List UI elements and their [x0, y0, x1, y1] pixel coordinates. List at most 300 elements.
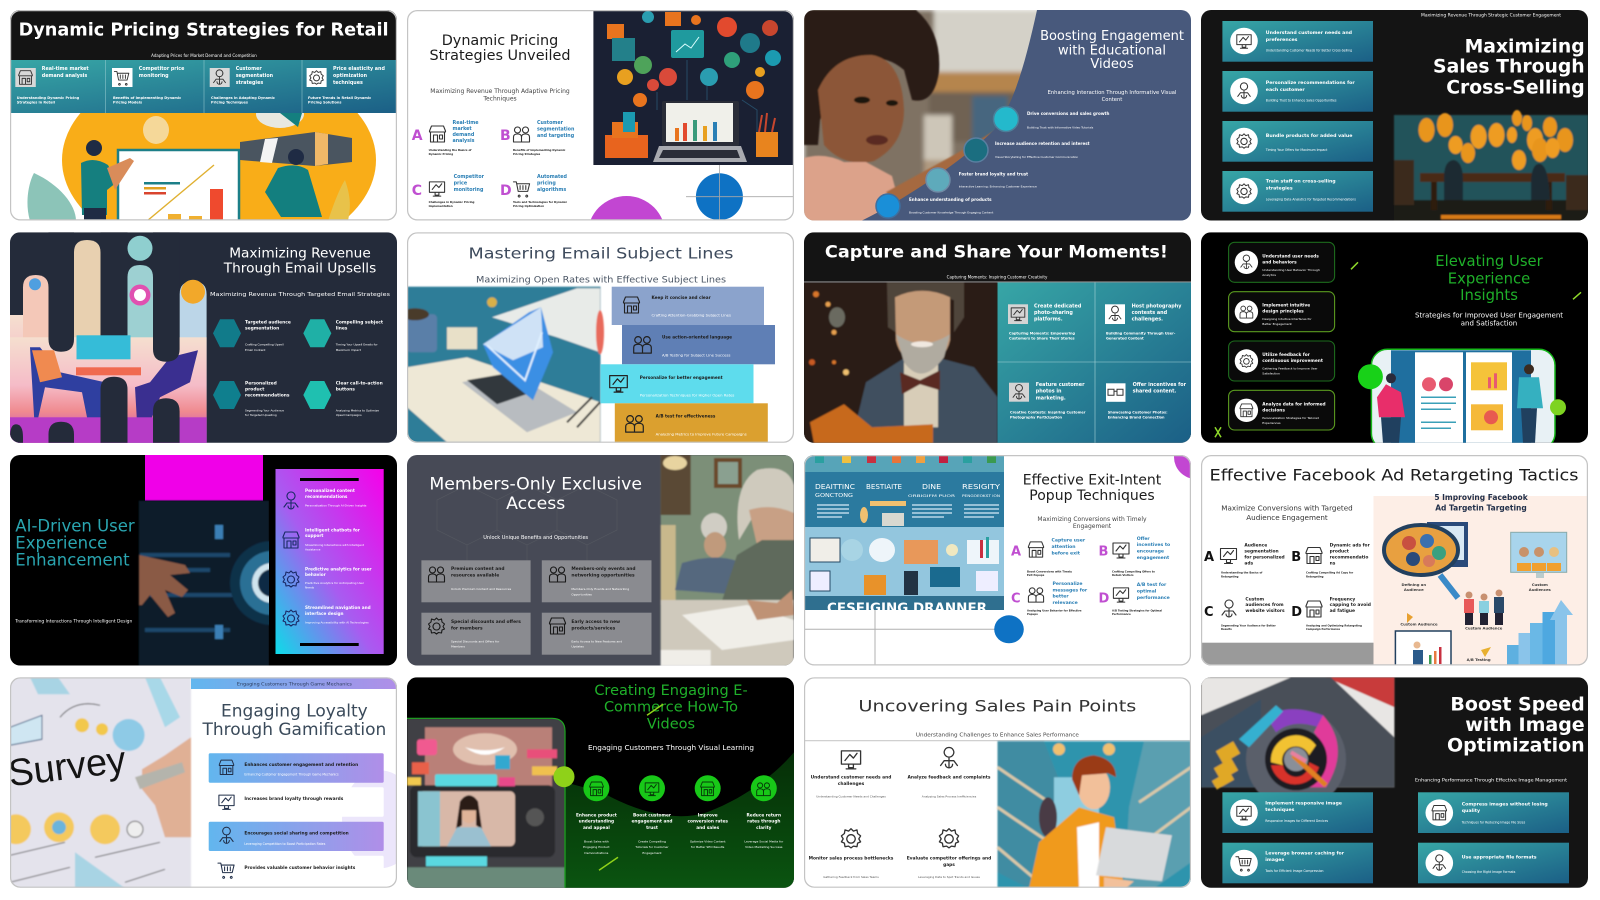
illustration: marketing infographic collage: [804, 455, 1004, 616]
icon: segments: [757, 783, 770, 796]
caption: Benefits of Implementing Dynamic: [113, 96, 181, 100]
card: real-time market demand analysis: [15, 66, 89, 104]
card: premium content: [421, 560, 531, 602]
caption: Enhancing Brand Connection: [1108, 415, 1165, 419]
heading: interface design: [305, 611, 344, 616]
subtitle: Maximizing Conversions with Timely: [1037, 516, 1147, 523]
grey footer block: [1201, 643, 1374, 666]
caption: Tools and Technologies for Dynamic: [513, 200, 567, 204]
blue circle: [994, 615, 1024, 643]
item D: [500, 174, 567, 208]
heading: optimization: [333, 73, 368, 79]
heading: Increases brand loyalty through rewards: [244, 796, 344, 802]
heading: website visitors: [1245, 608, 1285, 614]
caption: Unlock Premium Content and Resources: [451, 587, 512, 591]
heading: techniques: [1265, 807, 1295, 813]
panel: Engaging Loyalty Through Gamification: [1, 677, 418, 888]
card: understand customer needs: [1222, 21, 1373, 62]
heading: Audience: [1244, 542, 1267, 548]
icon: cart: [1236, 857, 1251, 871]
card: analyze data: [1229, 390, 1335, 430]
magenta corner shape: [1174, 435, 1218, 479]
gradient list panel: [276, 469, 384, 654]
caption: Pricing Optimization: [513, 204, 544, 208]
title: with Educational: [1058, 43, 1166, 58]
caption: Improving Accessibility with AI Technologies: [305, 620, 369, 624]
heading: analysis: [452, 138, 475, 144]
icon: store: [590, 782, 603, 796]
heading: Automated: [537, 174, 567, 180]
caption: Engagement: [642, 851, 662, 855]
icon: gear: [939, 829, 959, 848]
heading: ad fatigue: [1330, 608, 1355, 614]
caption: Analyzing User Behavior for Effective: [1027, 608, 1082, 612]
heading: A/B test for: [1137, 582, 1167, 588]
caption: Campaign Performance: [1306, 627, 1340, 631]
heading: Personalized content: [305, 488, 355, 493]
panel: Boost Speed with Image Optimization: [1201, 677, 1588, 888]
caption: Showcasing Customer Photos:: [1108, 410, 1168, 414]
heading: better: [1052, 594, 1069, 600]
heading: lines: [336, 326, 348, 332]
heading: Personalize recommendations for: [1266, 80, 1355, 86]
heading: quality: [1462, 808, 1480, 814]
panel: Members-Only Exclusive Access: [407, 455, 794, 666]
caption: Maximum Impact: [336, 348, 362, 352]
caption: Results: [1221, 627, 1232, 631]
heading: performance: [1137, 595, 1170, 601]
caption: Tutorials for Customer: [634, 845, 669, 849]
heading: Custom: [1245, 596, 1264, 602]
panel: Mastering Email Subject Lines: [401, 232, 794, 443]
caption: Leveraging Data to Spot Trends and Issues: [918, 875, 980, 879]
item: engagement and trust: [632, 775, 672, 855]
heading: Provides valuable customer behavior insights: [244, 865, 356, 871]
heading: challenges: [838, 781, 865, 787]
icon: monitor: [219, 795, 234, 809]
icon: cart: [513, 182, 530, 197]
caption: Pricing Models: [113, 100, 142, 104]
illustration: retargeting infographic: Defining an: [1402, 582, 1426, 587]
title: AI-Driven User: [15, 517, 135, 536]
heading: support: [305, 533, 323, 538]
icon badge: [926, 168, 950, 192]
caption: Crafting Compelling Upsell: [245, 343, 284, 347]
illustration: marketing infographic collage: ORBIGIFM PUOR: [908, 494, 956, 498]
item: drive conversions: [994, 106, 1110, 132]
card: offer incentives: [1106, 382, 1187, 419]
icon: pin: [284, 492, 298, 509]
item: product understanding: [576, 775, 617, 855]
heading: pricing: [537, 180, 556, 186]
heading: A/B test for effectiveness: [656, 413, 716, 418]
heading: Intelligent chatbots for: [305, 528, 361, 532]
caption: Create Compelling: [638, 839, 666, 843]
heading: ns: [1330, 562, 1336, 566]
heading: engagement: [1137, 555, 1170, 561]
caption: Challenges in Dynamic Pricing: [429, 200, 475, 204]
caption: Personalization Strategies for Tailored: [1262, 416, 1319, 420]
caption: Personalization Techniques for Higher Open Rates: [640, 392, 734, 397]
caption: Understanding the Basics of: [1221, 571, 1263, 575]
card: competitor price monitoring: [112, 66, 185, 104]
photo: woman on retro TV: [407, 718, 565, 888]
icon: store: [430, 126, 446, 142]
card: compress images: [1418, 792, 1569, 833]
title: Access: [506, 494, 565, 514]
icon: hand: [1109, 306, 1121, 321]
card: brand loyalty: [209, 787, 384, 817]
caption: Interactive Learning: Enhancing Customer Experience: [959, 184, 1037, 188]
top caption: Maximizing Revenue Through Strategic Customer Engagement: [1421, 12, 1561, 18]
subtitle: Maximize Conversions with Targeted: [1221, 504, 1353, 512]
caption: Personalization Through AI-Driven Insights: [305, 504, 367, 508]
caption: Segmenting Your Audience: [245, 408, 284, 412]
caption: Engaging Product: [583, 845, 610, 849]
illustration: marketing infographic collage: PENGOEOKST ION: [962, 494, 1000, 498]
card: members-only events: [542, 560, 652, 602]
heading: recommendations: [245, 392, 290, 398]
title: Boosting Engagement: [1040, 29, 1184, 44]
card: responsive image techniques: [1222, 792, 1373, 833]
caption: Customers to Share Their Stories: [1009, 336, 1075, 340]
illustration: marketing infographic collage: GONCTONG: [815, 493, 853, 499]
card: special discounts: [421, 613, 531, 655]
caption: Experiences: [1262, 421, 1281, 425]
icon: hexagon badge: [303, 319, 331, 347]
heading: Compress images without losing: [1462, 801, 1548, 807]
heading: recommendatio: [1330, 554, 1368, 560]
heading: algorithms: [537, 187, 566, 193]
icon: chess: [283, 571, 299, 587]
heading: photo-sharing: [1034, 310, 1073, 316]
caption: Demonstrations: [584, 851, 609, 855]
heading: Enhance understanding of products: [909, 197, 992, 202]
caption: Analyzing Metrics to Improve Future Campaigns: [656, 431, 747, 436]
heading: photos in: [1036, 389, 1062, 395]
navy content shape: [861, 10, 1191, 221]
heading: Members-only events and: [571, 566, 636, 572]
heading: Drive conversions and sales growth: [1027, 111, 1110, 116]
heading: resources available: [451, 572, 499, 578]
caption: Needs: [305, 586, 315, 590]
icon: monitor: [1220, 548, 1236, 564]
icon: cart: [218, 863, 234, 878]
item A: [412, 120, 479, 156]
heading: Price elasticity and: [333, 66, 385, 72]
heading: Customer: [537, 120, 564, 126]
heading: capping to avoid: [1330, 602, 1371, 608]
caption: Boost Sales with: [584, 839, 609, 843]
caption: Analyzing Sales Process Inefficiencies: [922, 794, 977, 798]
item B: [1291, 542, 1371, 579]
caption: Email Content: [245, 348, 266, 352]
icon: store: [19, 71, 32, 84]
photo: hand filling out survey: Survey: [6, 739, 128, 795]
heading: price: [454, 180, 468, 186]
heading: techniques: [333, 80, 363, 86]
heading: gaps: [943, 863, 955, 868]
heading: Utilize feedback for: [1262, 352, 1311, 358]
heading: clarity: [756, 825, 772, 831]
icon: segments: [514, 127, 530, 142]
caption: Enhancing Customer Engagement Through Game Mechanics: [244, 773, 339, 777]
caption: Early Access to New Features and: [571, 640, 622, 644]
title: Strategies Unveiled: [429, 48, 571, 64]
caption: Boosting Customer Knowledge Through Engaging Content: [909, 210, 994, 214]
heading: contests and: [1132, 310, 1168, 316]
panel: Effective Facebook Ad Retargeting Tactics: [1201, 455, 1588, 667]
green curved backdrop: [565, 752, 794, 888]
item: competitor offerings: [907, 829, 991, 879]
card: targeted audience segmentation: [213, 319, 291, 352]
letter: D: [1291, 605, 1302, 620]
icon: monitor: [1237, 806, 1251, 820]
blue target circle: [696, 173, 743, 220]
heading: Foster brand loyalty and trust: [959, 172, 1028, 176]
item B: [500, 120, 575, 156]
icon: monitor: [1113, 588, 1129, 602]
card: social sharing: [209, 822, 384, 851]
caption: Retain Visitors: [1112, 573, 1134, 577]
caption: Timing Your Offers for Maximum Impact: [1265, 148, 1328, 152]
illustration: retargeting infographic: Ad Targetin Targeting: [1435, 504, 1527, 513]
card: feedback: [1229, 341, 1335, 381]
subtitle: Maximizing Open Rates with Effective Subject Lines: [476, 275, 727, 285]
illustration: marketing infographic collage: DINE: [922, 483, 941, 491]
item: conversion rates: [687, 775, 728, 849]
card: keep it concise: [612, 287, 764, 325]
illustration: retargeting infographic: 5 Improving Facebook: [1434, 493, 1529, 502]
heading: each customer: [1266, 87, 1305, 93]
heading: Implement responsive image: [1265, 800, 1342, 806]
heading: optimal: [1137, 588, 1157, 594]
icon: gear: [1237, 134, 1251, 148]
caption: Understanding the Basics of: [429, 148, 472, 152]
caption: Performance: [1112, 612, 1131, 616]
subtitle: Maximizing Revenue Through Targeted Email Strategies: [210, 292, 390, 298]
panel: Boosting Engagement with Educational Videos: [804, 10, 1191, 221]
item B: [1098, 536, 1170, 577]
subtitle: Capturing Moments: Inspiring Customer Creativity: [947, 274, 1048, 279]
subtitle: Adapting Prices for Market Demand and Competition: [151, 53, 257, 58]
caption: A/B Testing for Subject Line Success: [662, 352, 730, 357]
caption: Implementation: [429, 204, 453, 208]
panel: Uncovering Sales Pain Points: [804, 677, 1192, 888]
item: return rates: [744, 775, 784, 849]
heading: buttons: [336, 386, 355, 392]
illustration: marketing infographic collage: CESFIGING DRANNER: [827, 602, 987, 616]
card: browser caching: [1222, 843, 1373, 883]
heading: before exit: [1052, 551, 1081, 557]
caption: Optimize Video Content: [690, 839, 726, 843]
subtitle: Audience Engagement: [1246, 513, 1328, 522]
heading: segmentation: [245, 326, 279, 332]
caption: Exit Popups: [1027, 573, 1045, 577]
subtitle: Enhancing Interaction Through Informative Visual: [1048, 90, 1176, 96]
caption: Leveraging Data Analytics for Targeted Recommendations: [1266, 198, 1356, 202]
caption: Pricing Strategies: [513, 152, 541, 156]
heading: Analyze feedback and complaints: [908, 774, 991, 780]
heading: products/services: [571, 626, 616, 632]
heading: incentives to: [1137, 542, 1170, 548]
heading: Use appropriate file formats: [1462, 854, 1537, 860]
item: personalized content: [284, 488, 367, 509]
card: intuitive design: [1229, 292, 1335, 332]
heading: Create dedicated: [1034, 303, 1082, 309]
heading: marketing.: [1036, 395, 1066, 401]
icon: store: [550, 618, 566, 634]
icon: hexagon badge: [303, 381, 331, 409]
caption: Understanding Customer Needs and Challenges: [816, 794, 886, 798]
card: action-oriented language: [622, 325, 775, 364]
heading: Real-time market: [42, 66, 89, 72]
dark cut-out bars: [48, 232, 74, 352]
item: predictive analytics: [283, 566, 373, 590]
heading: Compelling subject: [336, 319, 383, 325]
icon: people: [626, 416, 643, 432]
decoration: lime circle: [1550, 399, 1566, 415]
heading: attention: [1052, 544, 1076, 550]
title: Boost Speed: [1450, 694, 1585, 716]
card: file formats: [1418, 843, 1569, 883]
heading: product: [1330, 548, 1349, 554]
letter: D: [1098, 592, 1110, 607]
panel: Dynamic Pricing Strategies for Retail: [10, 10, 397, 220]
heading: Improve: [698, 812, 718, 818]
card: feature customer photos: [1009, 382, 1086, 419]
card: understand user needs: [1229, 242, 1335, 282]
photo: envelope on laptop: [401, 287, 604, 443]
photo: seniors painting at table: [661, 455, 794, 666]
icon: pin: [1238, 83, 1250, 98]
caption: Retargeting: [1221, 575, 1239, 579]
heading: and sales: [696, 825, 720, 831]
title: Effective Exit-Intent: [1023, 472, 1162, 488]
heading: segmentation: [537, 126, 575, 132]
heading: Predictive analytics for user: [305, 566, 373, 572]
heading: Premium content and: [451, 566, 504, 572]
icon: hand: [1013, 385, 1025, 399]
top ribbon: [191, 677, 397, 689]
caption: A/B Testing Strategies for Optimal: [1112, 608, 1162, 612]
subtitle: Strategies for Improved User Engagement: [1415, 311, 1563, 319]
item: foster loyalty: [926, 168, 1037, 192]
icon: cart: [114, 72, 129, 85]
icon: gear: [283, 610, 299, 626]
title: Commerce How-To: [604, 700, 738, 716]
subtitle: Unlock Unique Benefits and Opportunities: [483, 535, 589, 541]
heading: demand: [452, 132, 475, 138]
heading: decisions: [1262, 407, 1285, 413]
caption: Timing Your Upsell Emails for: [335, 343, 378, 347]
heading: shared content.: [1133, 389, 1176, 395]
item: increase retention: [964, 138, 1090, 162]
heading: ads: [1244, 560, 1254, 566]
card: clear call-to-action buttons: [303, 380, 383, 417]
photo: performance gauge: [1201, 677, 1394, 809]
icon: people: [1240, 306, 1253, 318]
subtitle: Understanding Challenges to Enhance Sales Performance: [916, 732, 1079, 738]
icon: pin: [220, 827, 233, 843]
photo: hand filling out survey: [1, 677, 191, 888]
title: Videos: [1090, 57, 1134, 72]
heading: Personalize for better engagement: [640, 375, 723, 380]
illustration: laptop with data icons: [593, 10, 794, 165]
caption: Analyzing Metrics to Optimize: [336, 408, 379, 412]
illustration: marketing infographic collage: DEAITTINC: [815, 483, 855, 491]
icon: store: [1432, 806, 1446, 820]
heading: recommendations: [305, 494, 348, 499]
decoration: lime marks: [1215, 262, 1581, 437]
item: chatbots: [283, 528, 365, 551]
title: Members-Only Exclusive: [429, 474, 642, 494]
icon: people: [634, 337, 651, 353]
panel: Maximizing Sales Through Cross-Selling: [1201, 10, 1588, 221]
heading: Leverage browser caching for: [1265, 850, 1345, 856]
caption: Techniques for Reducing Image File Sizes: [1461, 820, 1526, 824]
heading: behavior: [305, 572, 327, 577]
icon: hexagon badge: [213, 319, 241, 347]
header band: [10, 10, 397, 60]
title: Capture and Share Your Moments!: [825, 243, 1168, 263]
caption: Pricing Solutions: [308, 100, 341, 104]
caption: Dynamic Pricing: [429, 152, 453, 156]
heading: Frequency: [1330, 596, 1355, 602]
title: Dynamic Pricing: [442, 33, 558, 49]
caption: Photography Participation: [1010, 415, 1062, 419]
item C: [412, 174, 485, 208]
icon: store: [701, 782, 714, 796]
heading: continuous improvement: [1262, 358, 1323, 364]
letter: C: [1011, 592, 1021, 607]
letter: B: [500, 128, 511, 144]
letter: D: [500, 183, 512, 199]
item D: [1291, 596, 1371, 631]
title: Videos: [647, 716, 695, 732]
heading: for personalized: [1244, 554, 1285, 560]
heading: Analyze data for informed: [1262, 401, 1326, 407]
caption: Better Engagement: [1262, 322, 1293, 326]
heading: trust: [646, 825, 658, 831]
icon: store: [1306, 548, 1322, 564]
illustration: retargeting infographic: Audiences: [1529, 587, 1552, 592]
subtitle: Techniques: [482, 96, 517, 103]
letter: C: [1204, 605, 1214, 620]
caption: Analyzing and Optimizing Retargeting: [1306, 623, 1362, 627]
card: personalize recommendations: [1222, 71, 1373, 112]
item: feedback and complaints: [908, 748, 991, 798]
caption: Popups: [1027, 612, 1038, 616]
illustration: marketing infographic collage: BESTIAITE: [866, 483, 902, 491]
subtitle: Enhancing Performance Through Effective Image Management: [1415, 777, 1567, 783]
card: personalized product recommendations: [213, 380, 290, 417]
card: engagement and retention: [209, 753, 384, 783]
caption: Generated Content: [1106, 336, 1144, 340]
heading: Real-time: [452, 120, 479, 126]
caption: Assistance: [305, 547, 321, 551]
heading: strategies: [1266, 186, 1293, 192]
heading: Special discounts and offers: [451, 619, 521, 625]
teal grid: [998, 282, 1192, 443]
illustration: colleagues at a table through pill shapes: [10, 232, 207, 443]
letter: B: [1098, 545, 1108, 560]
subtitle: and Satisfaction: [1461, 320, 1517, 328]
caption: Analytics: [1262, 273, 1276, 277]
title: Elevating User: [1435, 253, 1544, 270]
caption: Updates: [571, 644, 584, 648]
heading: encourage: [1137, 548, 1164, 554]
